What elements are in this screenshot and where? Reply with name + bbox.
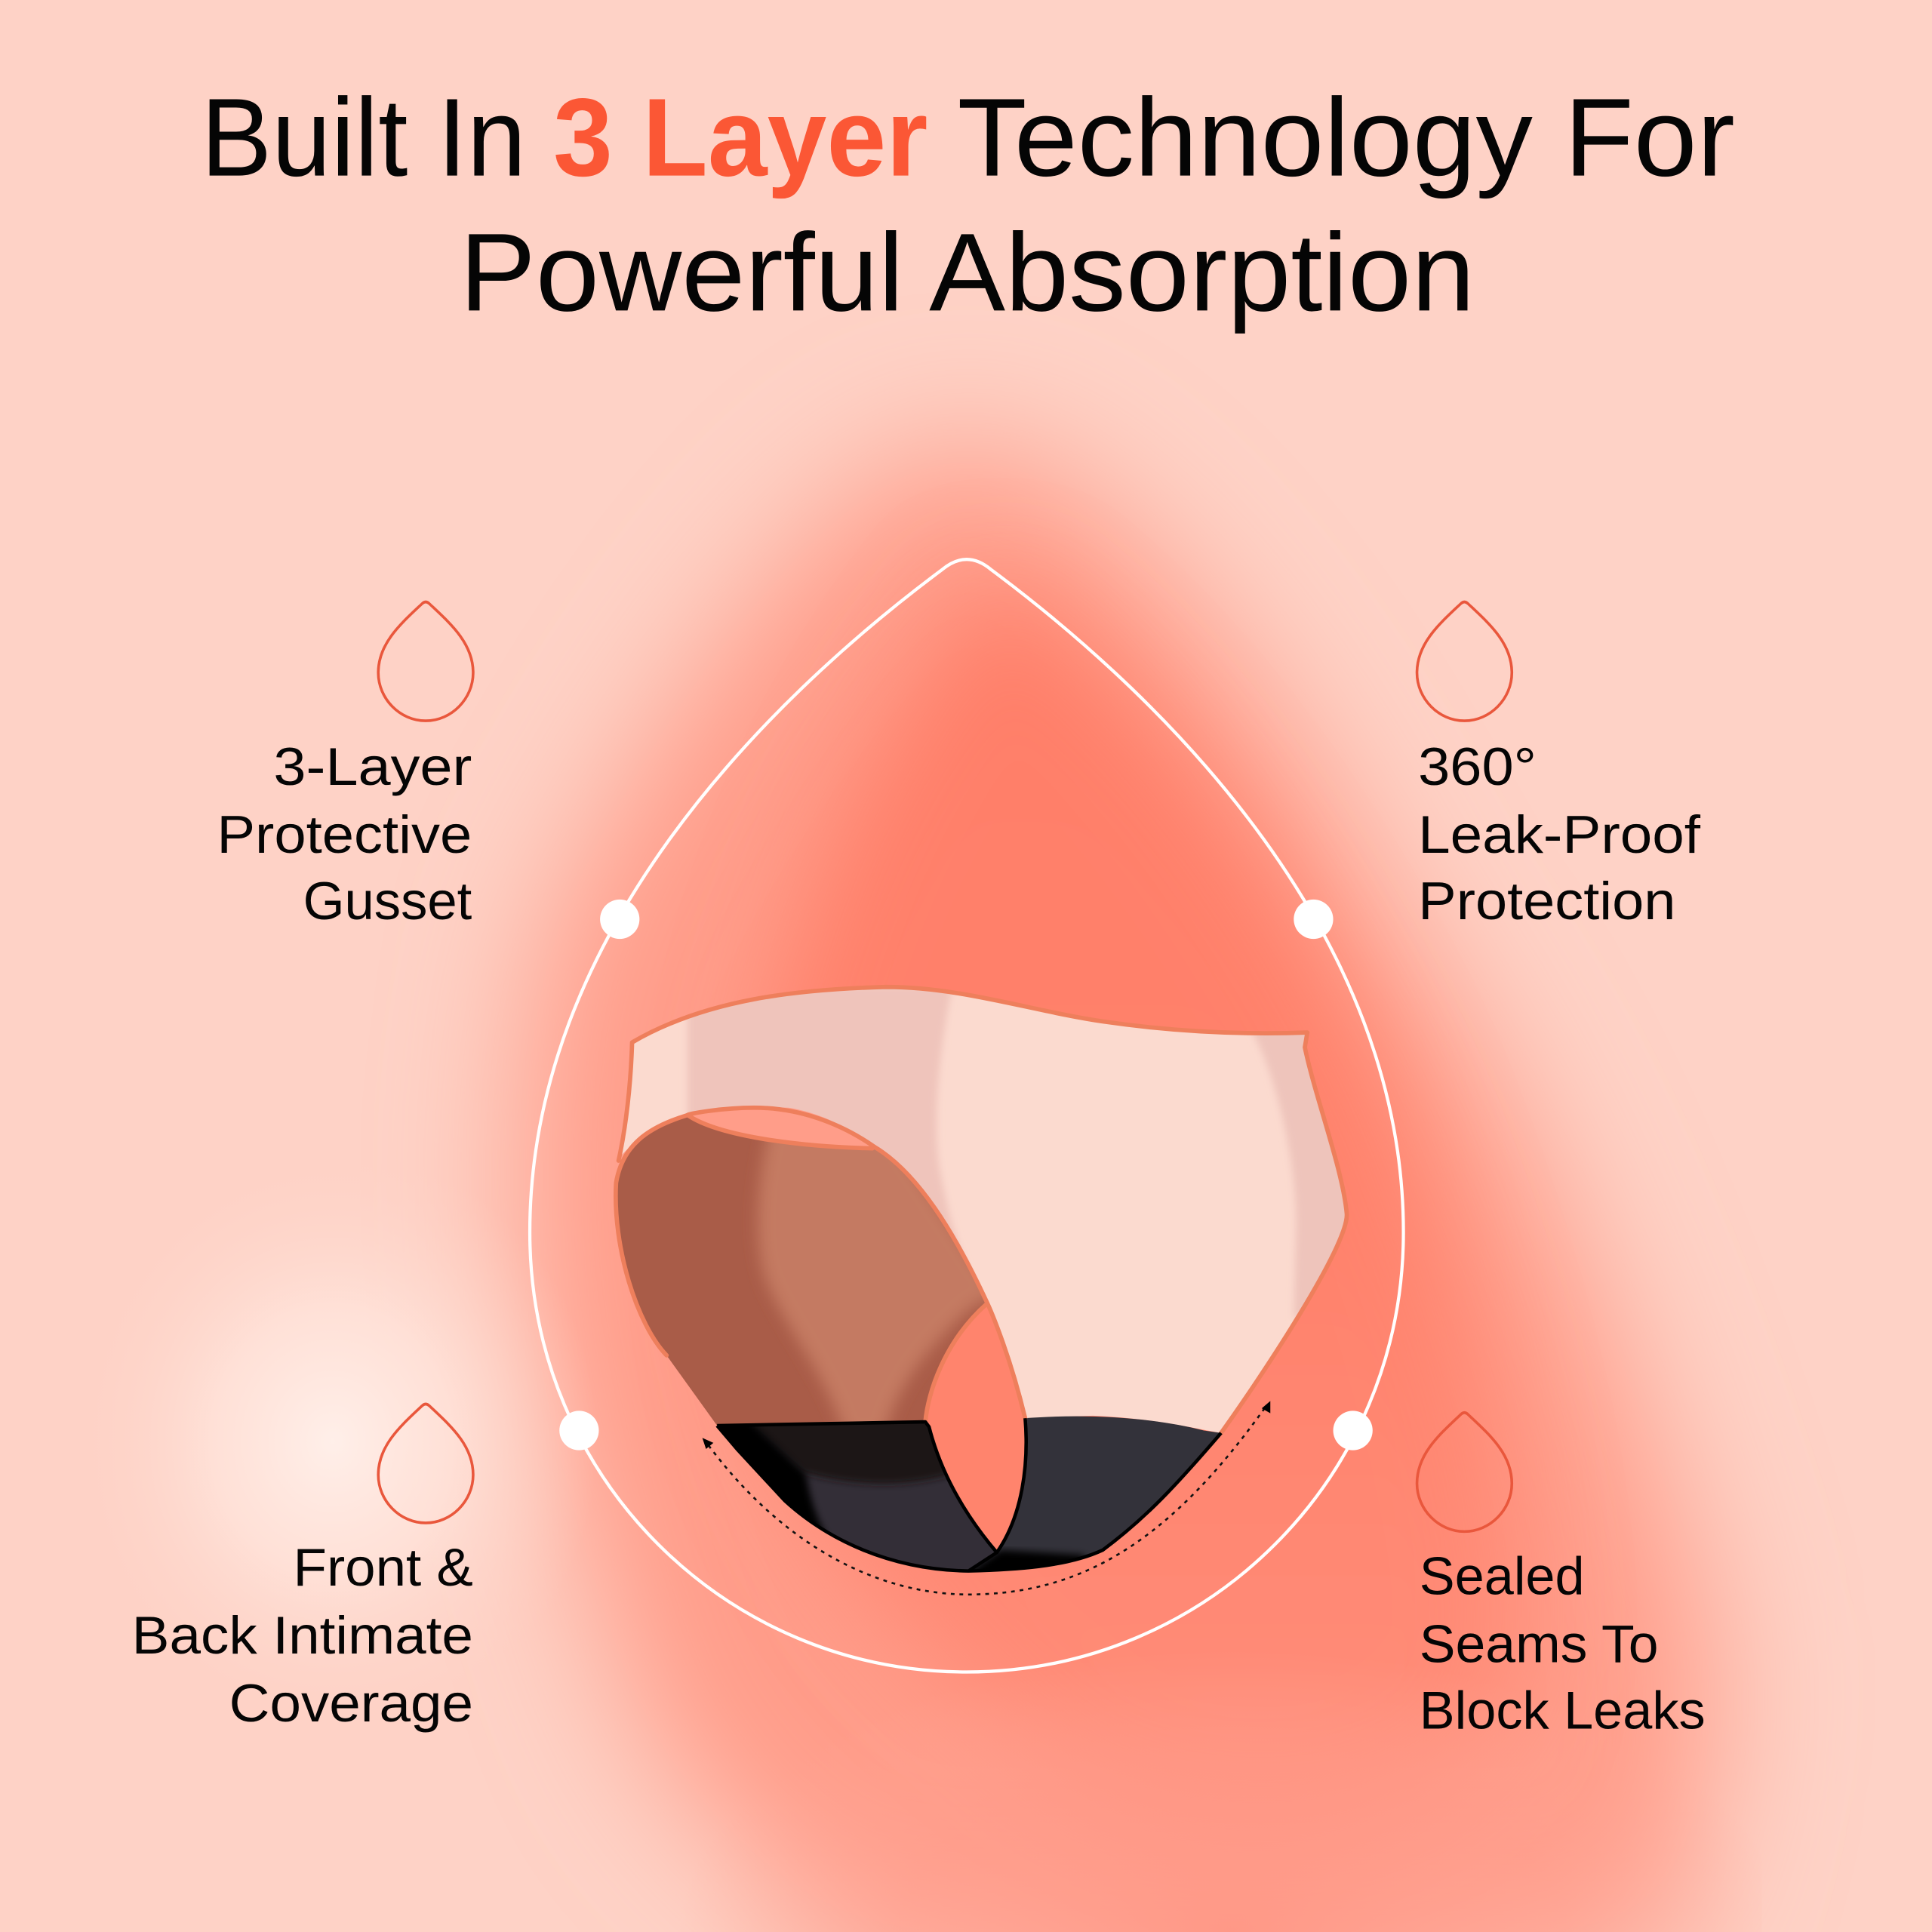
text: 360 Leak-Proof Protection: [1418, 737, 1701, 931]
dotted arrow around gusset: [703, 1401, 1270, 1595]
callout dot: top right: [1294, 900, 1334, 939]
gusset right: [961, 1417, 1221, 1583]
title: Built In: [201, 76, 526, 200]
icon: drop top right: [1417, 602, 1512, 721]
text: Front and Back Intimate Coverage: [132, 1537, 473, 1733]
back interior: [616, 1115, 998, 1435]
title: 3 Layer: [553, 76, 928, 200]
icon: drop bottom right: [1417, 1413, 1512, 1531]
text: 360 Leak-Proof Protection: Protection: [1418, 871, 1675, 931]
text: 3-Layer Protective Gusset: Protective: [217, 804, 472, 864]
callout dot: top left: [600, 900, 639, 939]
callout dot: bottom right: [1334, 1411, 1373, 1451]
text: Sealed Seams To Block Leaks: Block Leaks: [1420, 1681, 1706, 1740]
text: 360 Leak-Proof Protection: Leak-Proof: [1418, 804, 1701, 864]
title: [201, 76, 1735, 334]
waist opening sliver: [688, 1107, 872, 1147]
text: Sealed Seams To Block Leaks: Sealed: [1420, 1546, 1585, 1606]
icon: drop top left: [378, 602, 473, 721]
background glow: white spot: [68, 1146, 598, 1737]
garment outlines: [616, 987, 1347, 1433]
title: Technology For: [958, 76, 1735, 200]
inner leg lens: [925, 1303, 1028, 1552]
text: Front and Back Intimate Coverage: Front &: [294, 1537, 473, 1597]
garment illustration: [616, 986, 1380, 1583]
background glow: salmon gradient blob: [521, 444, 1715, 1932]
text: 3-Layer Protective Gusset: [217, 737, 472, 931]
text: Sealed Seams To Block Leaks: Seams To: [1420, 1614, 1659, 1673]
text: Front and Back Intimate Coverage: Coverage: [229, 1673, 473, 1733]
callout dot: bottom left: [559, 1411, 598, 1451]
text: 360 Leak-Proof Protection: 360°: [1418, 737, 1537, 796]
text: Sealed Seams To Block Leaks: [1420, 1546, 1706, 1740]
icon: drop bottom left: [378, 1404, 473, 1523]
arrow head right: [1262, 1401, 1270, 1414]
title: Powerful Absorption: [460, 211, 1475, 334]
text: 3-Layer Protective Gusset: 3-Layer: [273, 737, 472, 796]
gusset left: [721, 1423, 995, 1570]
text: Front and Back Intimate Coverage: Back Intimate: [132, 1605, 473, 1665]
background glow: bottom band: [678, 1648, 1762, 1932]
arrow head left: [703, 1438, 713, 1449]
front panel: [621, 986, 1380, 1433]
large drop outline: [530, 559, 1404, 1672]
text: 3-Layer Protective Gusset: Gusset: [303, 871, 472, 931]
